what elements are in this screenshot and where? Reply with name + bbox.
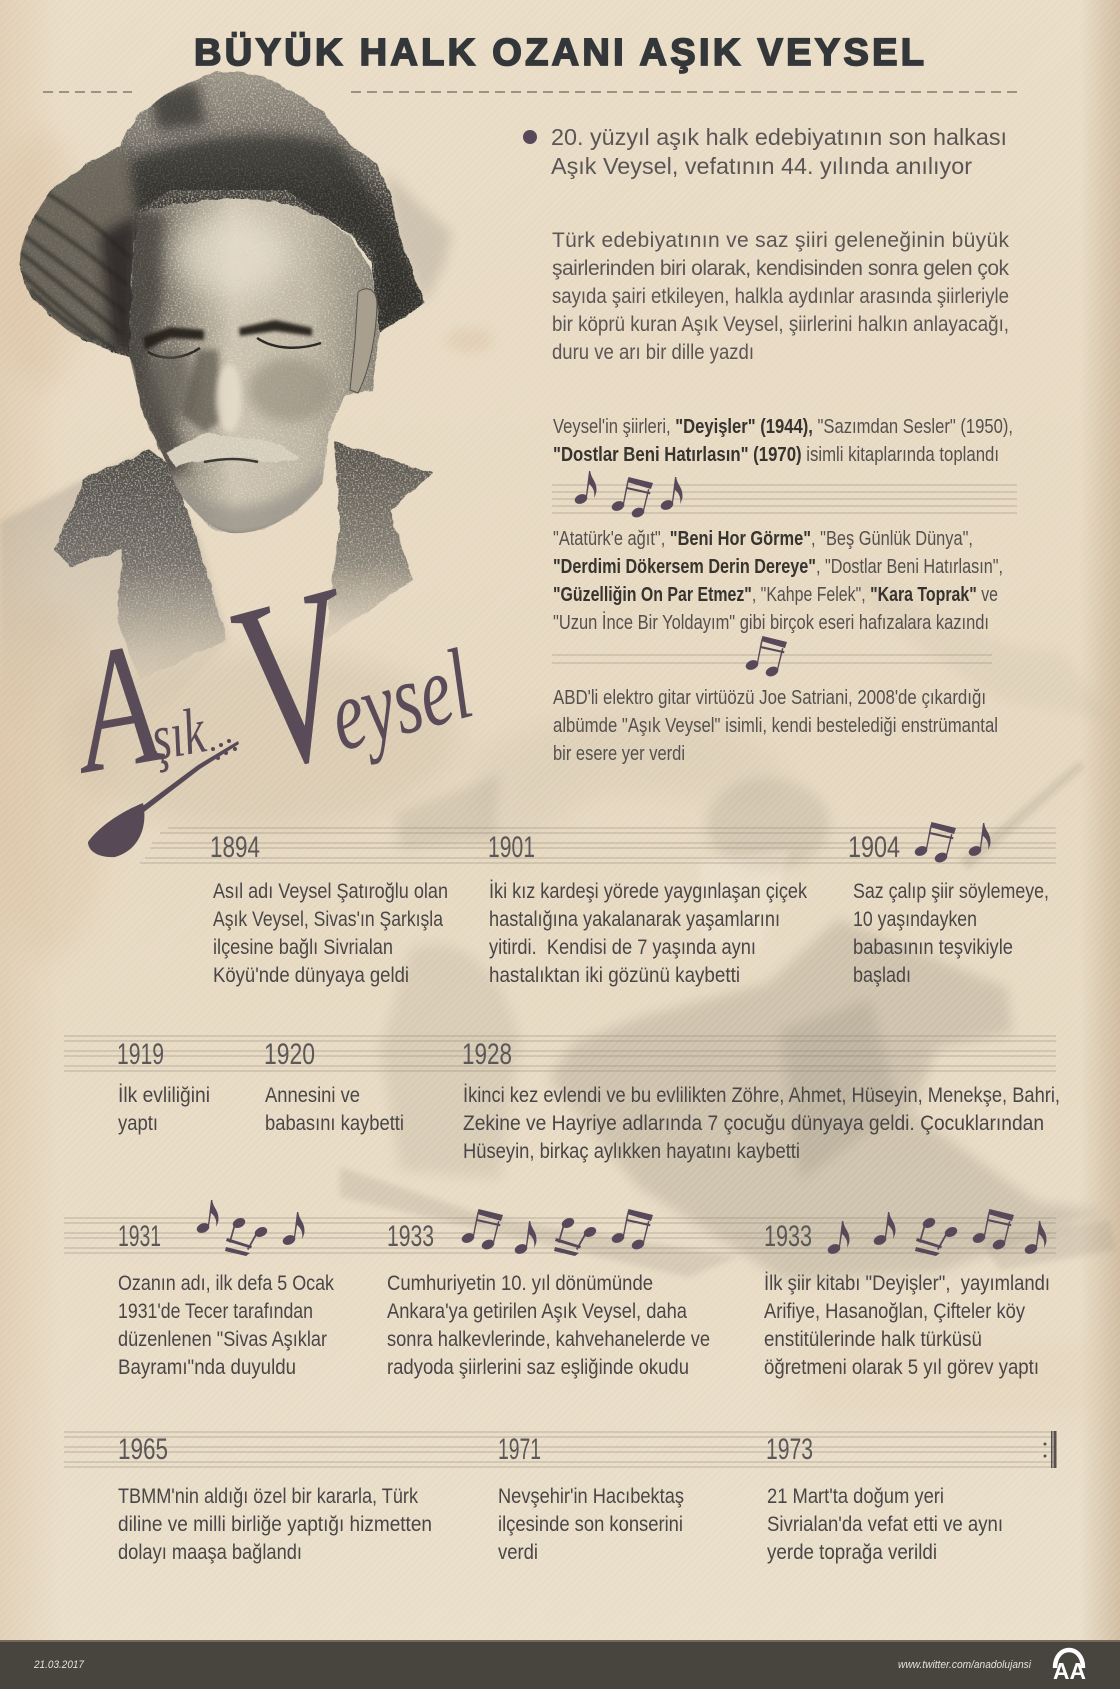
footer date: 21.03.2017 — [33, 1659, 85, 1671]
entry 1933 book — [764, 1209, 1050, 1379]
entry 1928: Hüseyin, birkaç aylıkken hayatını kaybetti — [463, 1140, 800, 1163]
entry 1904 — [848, 822, 1049, 987]
famous works paragraph: "Uzun İnce Bir Yoldayım" gibi birçok eseri hafızalara kazındı — [553, 611, 989, 634]
entry 1919: İlk evliliğini — [118, 1084, 210, 1107]
portrait of Aşık Veysel — [0, 71, 452, 740]
entry 1933 book: enstitülerinde halk türküsü — [764, 1328, 982, 1351]
intro headline: 20. yüzyıl aşık halk edebiyatının son halkası — [551, 124, 1007, 150]
entry 1901: hastalığına yakalanarak yaşamlarını — [489, 908, 780, 931]
entry 1933 concert: Cumhuriyetin 10. yıl dönümünde — [387, 1272, 653, 1295]
entry 1904: 1904 — [848, 831, 900, 864]
Joe Satriani paragraph: albümde "Aşık Veysel" isimli, kendi bestelediği enstrümantal — [553, 715, 998, 737]
icon: saz instrument — [88, 739, 239, 857]
staff lines row 4 — [64, 1432, 1056, 1467]
intro paragraph: duru ve arı bir dille yazdı — [552, 341, 754, 364]
staff with notes: poems — [552, 471, 1017, 519]
entry 1973: 21 Mart'ta doğum yeri — [767, 1485, 944, 1508]
staff lines row 2 — [64, 1036, 1056, 1071]
intro paragraph: bir köprü kuran Aşık Veysel, şiirlerini halkın anlayacağı, — [552, 313, 1009, 336]
entry 1901 — [488, 831, 807, 987]
footer bar — [0, 1640, 1120, 1689]
entry 1919 — [117, 1038, 210, 1135]
entry 1920 — [264, 1038, 404, 1135]
entry 1901: İki kız kardeşi yörede yaygınlaşan çiçek — [489, 880, 807, 903]
logo: Anadolu Agency: AA — [1053, 1658, 1086, 1684]
timeline row 1 — [140, 822, 1056, 987]
staff with note: works — [552, 636, 992, 678]
hat wash right — [385, 170, 452, 303]
entry 1928: 1928 — [462, 1038, 512, 1071]
entry 1933 book: 1933 — [764, 1220, 812, 1253]
entry 1933 concert: sonra halkevlerinde, kahvehanelerde ve — [387, 1328, 710, 1351]
famous works paragraph — [553, 528, 1003, 634]
entry 1973: yerde toprağa verildi — [767, 1541, 937, 1564]
entry 1904: başladı — [853, 964, 911, 987]
books paragraph — [553, 416, 1013, 466]
intro paragraph: Türk edebiyatının ve saz şiiri geleneğinin büyük — [552, 229, 1010, 252]
intro paragraph: sayıda şairi etkileyen, halkla aydınlar arasında şiirleriyle — [552, 285, 1009, 308]
entry 1894 — [210, 831, 448, 987]
bullet — [523, 130, 537, 144]
entry 1894: 1894 — [210, 831, 260, 864]
entry 1904: babasının teşvikiyle — [853, 936, 1013, 959]
entry 1904: 10 yaşındayken — [853, 908, 977, 931]
entry 1933 concert: radyoda şiirlerini saz eşliğinde okudu — [387, 1356, 689, 1379]
entry 1901: yitirdi. Kendisi de 7 yaşında aynı — [489, 936, 756, 959]
entry 1920: babasını kaybetti — [265, 1112, 404, 1135]
title: BÜYÜK HALK OZANI AŞIK VEYSEL — [194, 31, 924, 74]
entry 1919: 1919 — [117, 1038, 164, 1071]
staff lines row 1 — [140, 828, 1056, 863]
entry 1971: ilçesinde son konserini — [498, 1513, 683, 1536]
title rule right — [351, 91, 1023, 93]
intro paragraph — [552, 229, 1010, 364]
entry 1933 concert: 1933 — [387, 1220, 434, 1253]
entry 1901: hastalıktan iki gözünü kaybetti — [489, 964, 740, 987]
timeline row 2 — [64, 1036, 1060, 1163]
signature: Aşık: Aşık — [54, 598, 216, 812]
entry 1901: 1901 — [488, 831, 535, 864]
famous works paragraph: "Atatürk'e ağıt", "Beni Hor Görme", "Beş Günlük Dünya", — [553, 528, 973, 550]
entry 1894: ilçesine bağlı Sivrialan — [213, 936, 393, 959]
hat — [20, 71, 425, 358]
face — [128, 199, 379, 533]
repeat bar — [1044, 1431, 1056, 1468]
entry 1973: 1973 — [766, 1433, 813, 1466]
ghost photo of the seated poet behind timeline — [340, 560, 1115, 1282]
famous works paragraph: "Derdimi Dökersem Derin Dereye", "Dostlar Beni Hatırlasın", — [553, 556, 1003, 578]
books paragraph: Veysel'in şiirleri, "Deyişler" (1944), "Sazımdan Sesler" (1950), — [553, 416, 1013, 438]
entry 1933 concert: Ankara'ya getirilen Aşık Veysel, daha — [387, 1300, 687, 1323]
facial features — [120, 205, 332, 545]
left lapel — [55, 450, 227, 680]
entry 1933 book: öğretmeni olarak 5 yıl görev yaptı — [764, 1356, 1039, 1379]
entry 1965: diline ve milli birliğe yaptığı hizmetten — [118, 1513, 432, 1536]
entry 1894: Asıl adı Veysel Şatıroğlu olan — [213, 880, 448, 903]
entry 1919: yaptı — [118, 1112, 158, 1135]
famous works paragraph: "Güzelliğin On Par Etmez", "Kahpe Felek", "Kara Toprak" ve — [553, 584, 998, 606]
Joe Satriani paragraph — [553, 687, 998, 765]
hat shading — [15, 82, 425, 358]
entry 1920: 1920 — [264, 1038, 315, 1071]
Joe Satriani paragraph: ABD'li elektro gitar virtüözü Joe Satriani, 2008'de çıkardığı — [553, 687, 986, 709]
staff lines row 3 — [64, 1218, 1056, 1253]
entry 1928: Zekine ve Hayriye adlarında 7 çocuğu dünyaya geldi. Çocuklarından — [463, 1112, 1044, 1135]
coat — [0, 450, 230, 740]
intro headline: Aşık Veysel, vefatının 44. yılında anılıyor — [551, 153, 972, 179]
intro paragraph: şairlerinden biri olarak, kendisinden sonra gelen çok — [552, 257, 1010, 280]
entry 1933 concert — [387, 1209, 710, 1379]
right lapel — [325, 440, 433, 640]
timeline row 3 — [64, 1200, 1056, 1379]
entry 1928 — [462, 1038, 1060, 1163]
entry 1904: Saz çalıp şiir söylemeye, — [853, 880, 1049, 903]
entry 1973: Sivrialan'da vefat etti ve aynı — [767, 1513, 1003, 1536]
entry 1931: Ozanın adı, ilk defa 5 Ocak — [118, 1272, 334, 1295]
entry 1965: dolayı maaşa bağlandı — [118, 1541, 302, 1564]
ear — [350, 289, 377, 393]
books paragraph: "Dostlar Beni Hatırlasın" (1970) isimli kitaplarında toplandı — [553, 444, 999, 466]
title rule left — [43, 91, 132, 93]
entry 1971 — [498, 1433, 684, 1564]
entry 1933 book: İlk şiir kitabı "Deyişler", yayımlandı — [764, 1272, 1050, 1295]
entry 1971: verdi — [498, 1541, 538, 1564]
entry 1933 book: Arifiye, Hasanoğlan, Çifteler köy — [764, 1300, 1025, 1323]
entry 1931: düzenlenen "Sivas Aşıklar — [118, 1328, 327, 1351]
entry 1920: Annesini ve — [265, 1084, 360, 1107]
footer url: www.twitter.com/anadolujansi — [898, 1659, 1032, 1671]
entry 1971: 1971 — [498, 1433, 541, 1466]
entry 1894: Köyü'nde dünyaya geldi — [213, 964, 409, 987]
entry 1931 — [118, 1200, 334, 1379]
entry 1965: 1965 — [118, 1433, 168, 1466]
signature: Veysel: Veysel — [206, 507, 490, 822]
entry 1973 — [766, 1433, 1003, 1564]
entry 1894: Aşık Veysel, Sivas'ın Şarkışla — [213, 908, 443, 931]
Joe Satriani paragraph: bir esere yer verdi — [553, 743, 685, 765]
entry 1931: 1931'de Tecer tarafından — [118, 1300, 313, 1323]
entry 1965: TBMM'nin aldığı özel bir kararla, Türk — [118, 1485, 418, 1508]
entry 1971: Nevşehir'in Hacıbektaş — [498, 1485, 684, 1508]
intro headline — [551, 124, 1007, 179]
timeline row 4 — [64, 1431, 1056, 1564]
entry 1931: Bayramı"nda duyuldu — [118, 1356, 296, 1379]
entry 1965 — [118, 1433, 432, 1564]
entry 1931: 1931 — [118, 1220, 161, 1253]
